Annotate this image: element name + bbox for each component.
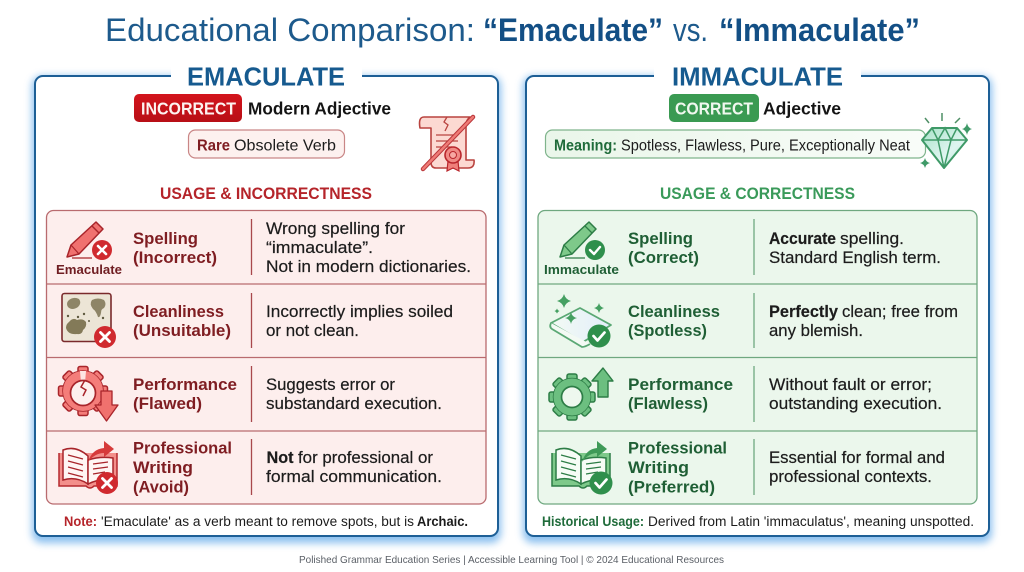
label: professional writing preferred	[628, 438, 727, 496]
row: spelling incorrect	[56, 220, 471, 277]
icon: book with check	[552, 441, 612, 494]
title: vs.	[673, 12, 708, 48]
note: archaic verb: 'Emaculate' as a verb meant to remove spots, but is	[101, 514, 414, 529]
description: implies soiled	[266, 303, 453, 340]
tag: rare obsolete verb: Obsolete Verb	[234, 138, 336, 154]
icon: book with cross	[59, 441, 118, 494]
panel: immaculate	[523, 60, 992, 543]
icon: pencil with cross	[56, 222, 122, 277]
meaning bar: Spotless, Flawless, Pure, Exceptionally Neat	[621, 138, 911, 154]
description: not for professional: formal communication.	[266, 468, 442, 486]
panel: emaculate	[32, 60, 501, 543]
row: performance flawless	[549, 368, 942, 420]
label: professional writing avoid	[133, 438, 232, 496]
label: cleanliness unsuitable	[133, 302, 231, 340]
footer: Polished Grammar Education Series | Accessible Learning Tool | © 2024 Educational Resources	[299, 554, 724, 566]
icon: pencil with cross: Emaculate	[56, 263, 122, 277]
meaning bar: Meaning:	[554, 138, 617, 154]
description: accurate spelling: spelling.	[840, 230, 904, 248]
row: cleanliness spotless	[550, 294, 958, 348]
description: not for professional	[266, 449, 442, 486]
description: perfectly clean: clean; free from	[842, 303, 958, 321]
heading: usage and correctness: USAGE & CORRECTNESS	[660, 184, 855, 203]
row: performance flawed	[58, 366, 442, 421]
description: wrong spelling	[266, 220, 471, 276]
heading: immaculate: IMMACULATE	[672, 62, 843, 92]
label: professional writing avoid: (Avoid)	[133, 478, 189, 496]
badge: incorrect modern adjective: INCORRECT	[141, 98, 236, 118]
label: spelling incorrect	[133, 229, 217, 267]
icon: gear with up arrow	[549, 368, 613, 420]
label: spelling correct: Spelling	[628, 229, 693, 248]
label: performance flawed: (Flawed)	[133, 394, 202, 413]
description: not for professional: Not	[266, 449, 294, 467]
label: cleanliness unsuitable: (Unsuitable)	[133, 321, 231, 340]
description: without fault	[769, 376, 942, 413]
label: spelling correct: (Correct)	[628, 248, 699, 267]
note: archaic verb: Note:	[64, 514, 97, 529]
description: without fault: outstanding execution.	[769, 395, 942, 413]
label: professional writing preferred: Professional	[628, 438, 727, 458]
label: spelling incorrect: Spelling	[133, 229, 198, 248]
description: essential	[769, 449, 945, 486]
row: professional writing preferred	[552, 438, 945, 496]
label: professional writing preferred: Writing	[628, 458, 689, 477]
row: spelling correct	[544, 222, 941, 277]
label: cleanliness unsuitable: Cleanliness	[133, 302, 224, 321]
description: wrong spelling: Wrong spelling for	[266, 220, 406, 238]
label: cleanliness spotless: (Spotless)	[628, 321, 707, 340]
badge: incorrect modern adjective	[134, 94, 391, 122]
icon: pencil with check	[544, 222, 619, 277]
label: cleanliness spotless: Cleanliness	[628, 302, 720, 321]
description: essential: professional contexts.	[769, 468, 932, 486]
label: professional writing avoid: Professional	[133, 438, 232, 458]
description: suggests error	[266, 376, 442, 413]
description: wrong spelling: Not in modern dictionaries.	[266, 258, 471, 276]
label: performance flawless: Performance	[628, 375, 733, 394]
description: accurate spelling: Accurate	[769, 230, 836, 248]
description: not for professional: for professional or	[298, 449, 434, 467]
description: suggests error: substandard execution.	[266, 395, 442, 413]
description: accurate spelling: Standard English term.	[769, 249, 941, 267]
tag: rare obsolete verb	[188, 130, 344, 158]
badge: incorrect modern adjective: Modern Adjective	[248, 98, 391, 118]
description: implies soiled: or not clean.	[266, 322, 359, 340]
icon: pencil with check: Immaculate	[544, 263, 619, 277]
table: correct usage	[538, 210, 977, 504]
title: “Emaculate”	[483, 12, 663, 48]
label: performance flawed	[133, 375, 237, 413]
label: cleanliness spotless	[628, 302, 720, 340]
description: accurate spelling	[769, 230, 941, 267]
badge: correct adjective: Adjective	[763, 98, 841, 118]
description: suggests error: Suggests error or	[266, 376, 395, 394]
table: incorrect usage	[46, 210, 486, 504]
note: historical usage: Derived from Latin 'immaculatus', meaning unspotted.	[648, 514, 974, 529]
label: spelling correct	[628, 229, 699, 267]
icon: diamond	[920, 113, 972, 168]
label: performance flawless: (Flawless)	[628, 394, 708, 413]
heading: emaculate: EMACULATE	[187, 62, 345, 92]
badge: correct adjective: CORRECT	[675, 98, 753, 118]
row: professional writing avoid	[59, 438, 442, 496]
row: cleanliness unsuitable	[62, 294, 453, 348]
icon: broken gear with down arrow	[58, 366, 118, 421]
description: essential: Essential for formal and	[769, 449, 945, 467]
meaning bar	[546, 130, 926, 158]
badge: correct adjective	[669, 94, 841, 122]
description: implies soiled: Incorrectly implies soiled	[266, 303, 453, 321]
description: perfectly clean: any blemish.	[769, 322, 863, 340]
description: wrong spelling: “immaculate”.	[266, 239, 373, 257]
label: spelling incorrect: (Incorrect)	[133, 248, 217, 267]
title: Educational Comparison:	[105, 12, 475, 48]
icon: sparkling cloth with check	[550, 294, 611, 348]
description: perfectly clean: Perfectly	[769, 303, 839, 321]
description: without fault: Without fault or error;	[769, 376, 932, 394]
tag: rare obsolete verb: Rare	[197, 138, 230, 154]
note: historical usage: Historical Usage:	[542, 514, 644, 529]
label: performance flawed: Performance	[133, 375, 237, 394]
title	[105, 12, 920, 48]
label: professional writing avoid: Writing	[133, 458, 193, 477]
title: “Immaculate”	[719, 12, 920, 48]
note: archaic verb: Archaic.	[417, 514, 468, 529]
heading: usage and incorrectness: USAGE & INCORRECTNESS	[160, 184, 372, 203]
icon: crossed-out scroll	[420, 117, 474, 171]
icon: stained cloth with cross	[62, 294, 116, 348]
label: performance flawless	[628, 375, 733, 413]
description: perfectly clean	[769, 303, 958, 340]
label: professional writing preferred: (Preferred)	[628, 478, 715, 496]
